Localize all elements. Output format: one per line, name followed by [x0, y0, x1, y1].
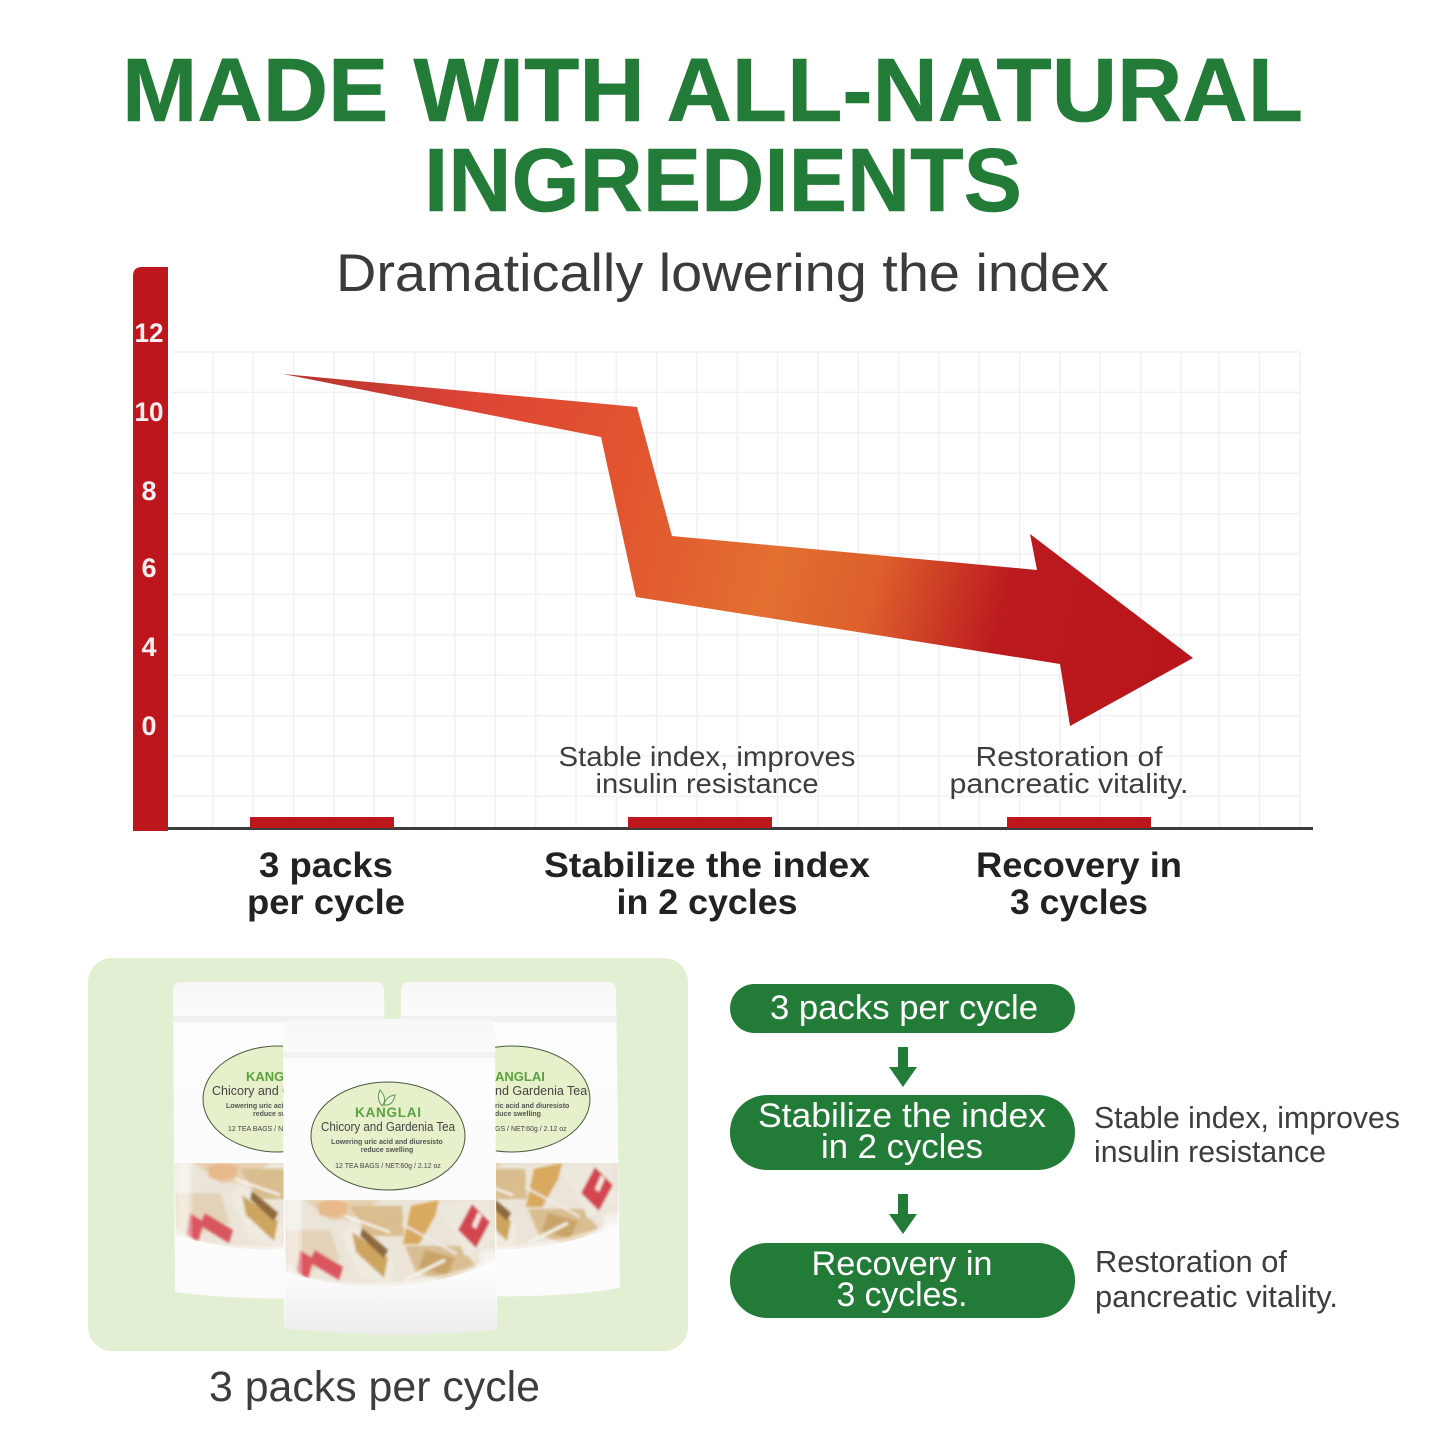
y axis labels: 0	[141, 711, 157, 741]
product panel	[88, 958, 688, 1351]
note: stable index: insulin resistance	[1094, 1134, 1326, 1169]
y axis labels: 4	[141, 632, 157, 662]
step: 3 packs	[730, 984, 1075, 1033]
chart	[133, 267, 1313, 922]
step: recovery: Recovery in	[812, 1245, 992, 1283]
x label: recovery	[976, 846, 1182, 922]
title	[122, 41, 1303, 231]
pouch: left: reduce swelling	[253, 1111, 306, 1118]
annotation: restoration: pancreatic vitality.	[950, 768, 1188, 799]
trend arrow	[283, 374, 1193, 726]
x label: recovery: 3 cycles	[1010, 883, 1148, 922]
pouch: right: GS / NET:60g / 2.12 oz	[495, 1126, 567, 1133]
pouch label: KANGLAI	[355, 1105, 421, 1120]
caption: 3 packs per cycle	[209, 1363, 540, 1411]
x axis line	[168, 827, 1313, 830]
arrow down	[889, 1047, 917, 1087]
y axis labels: 6	[141, 553, 157, 583]
title: MADE WITH ALL-NATURAL	[122, 41, 1303, 141]
step: 3 packs: 3 packs per cycle	[770, 989, 1038, 1027]
note: restoration: pancreatic vitality.	[1095, 1279, 1338, 1314]
y axis labels	[134, 318, 164, 741]
x axis markers	[250, 817, 1151, 828]
grid	[172, 352, 1300, 828]
x label: 3 packs	[247, 846, 405, 922]
x label: 3 packs: 3 packs	[259, 846, 393, 885]
pouch: right: ric acid and diuresisto	[495, 1103, 569, 1110]
note: stable index	[1094, 1100, 1400, 1169]
pouch: right: duce swelling	[495, 1111, 541, 1118]
y axis labels: 8	[141, 476, 157, 506]
y axis bar	[133, 267, 168, 831]
pouch window	[280, 1195, 500, 1311]
pouch: left: KANGLAI	[246, 1069, 305, 1084]
step: stabilize	[730, 1095, 1075, 1170]
annotation: restoration	[950, 741, 1188, 799]
pouch label	[311, 1082, 465, 1190]
pouch: front	[280, 1019, 500, 1335]
annotation: stable index: insulin resistance	[596, 768, 818, 799]
x label: stabilize: Stabilize the index	[544, 846, 871, 885]
pouch: left: Lowering uric acid and	[226, 1103, 302, 1110]
x label: stabilize	[544, 846, 871, 922]
x label: stabilize: in 2 cycles	[616, 883, 798, 922]
annotation: restoration: Restoration of	[976, 741, 1163, 772]
leaf icon	[378, 1090, 395, 1106]
step: stabilize: in 2 cycles	[821, 1128, 983, 1166]
pouch label: Chicory and Gardenia Tea	[321, 1120, 455, 1134]
pouch label: reduce swelling	[361, 1147, 413, 1154]
note: restoration: Restoration of	[1095, 1244, 1287, 1279]
annotation: stable index: Stable index, improves	[558, 741, 856, 772]
pouch: right: ANGLAI	[495, 1069, 545, 1084]
step: stabilize: Stabilize the index	[758, 1097, 1046, 1135]
y axis labels: 12	[134, 318, 164, 348]
pouch: right: nd Gardenia Tea	[495, 1084, 587, 1098]
step: recovery: 3 cycles.	[836, 1276, 968, 1314]
pouch: left	[170, 982, 400, 1298]
title: INGREDIENTS	[424, 131, 1022, 231]
pouch label: Lowering uric acid and diuresisto	[331, 1139, 443, 1146]
pouch label: 12 TEA BAGS / NET:60g / 2.12 oz	[335, 1163, 441, 1170]
flow	[730, 984, 1400, 1318]
arrow down	[889, 1194, 917, 1234]
x label: 3 packs: per cycle	[247, 883, 405, 922]
y axis labels: 10	[134, 397, 164, 427]
pouch: left: 12 TEA BAGS / NET:60g	[228, 1126, 305, 1133]
note: stable index: Stable index, improves	[1094, 1100, 1400, 1135]
pouch: left: Chicory and Gardenia Tea	[212, 1084, 357, 1098]
x label: recovery: Recovery in	[976, 846, 1182, 885]
step: recovery	[730, 1243, 1075, 1318]
pouch: right	[401, 982, 623, 1296]
note: restoration	[1095, 1244, 1338, 1314]
annotation: stable index	[558, 741, 856, 799]
chart heading: Dramatically lowering the index	[336, 244, 1109, 303]
